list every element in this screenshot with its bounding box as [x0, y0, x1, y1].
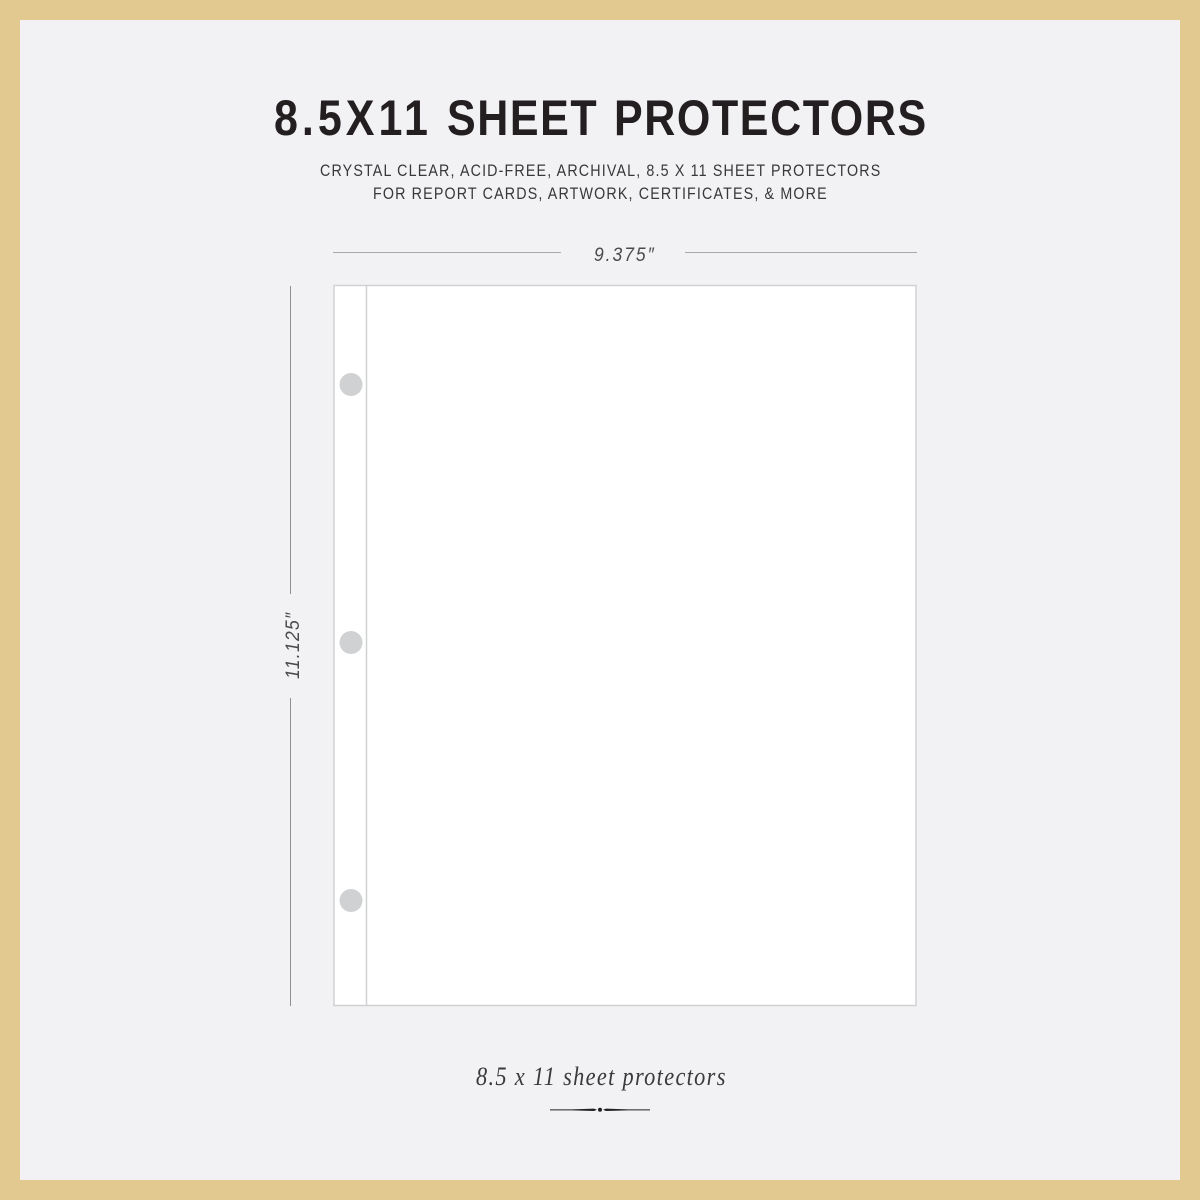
caption: 8.5 x 11 sheet protectors [476, 1062, 725, 1091]
title: SHEET [447, 90, 597, 146]
punch hole: top [340, 373, 362, 396]
title: 8.5X11 [274, 90, 428, 146]
sheet protector diagram [334, 286, 916, 1006]
subtitle text block: CRYSTAL CLEAR, ACID-FREE, ARCHIVAL, 8.5 X 11 SHEET PROTECTORS [320, 162, 880, 180]
sheet outline [334, 286, 916, 1006]
binding strip divider [366, 286, 368, 1006]
height dimension: 11.125 inches: 11.125″ [281, 612, 303, 679]
title [274, 90, 926, 146]
title: PROTECTORS [614, 90, 926, 146]
width dimension: 9.375 inches: 9.375″ [594, 243, 654, 265]
subtitle text block: FOR REPORT CARDS, ARTWORK, CERTIFICATES, & MORE [373, 185, 827, 203]
punch hole: middle [340, 631, 362, 654]
punch hole: bottom [340, 889, 362, 912]
subtitle text block [320, 162, 880, 203]
ornament divider [550, 1108, 650, 1112]
